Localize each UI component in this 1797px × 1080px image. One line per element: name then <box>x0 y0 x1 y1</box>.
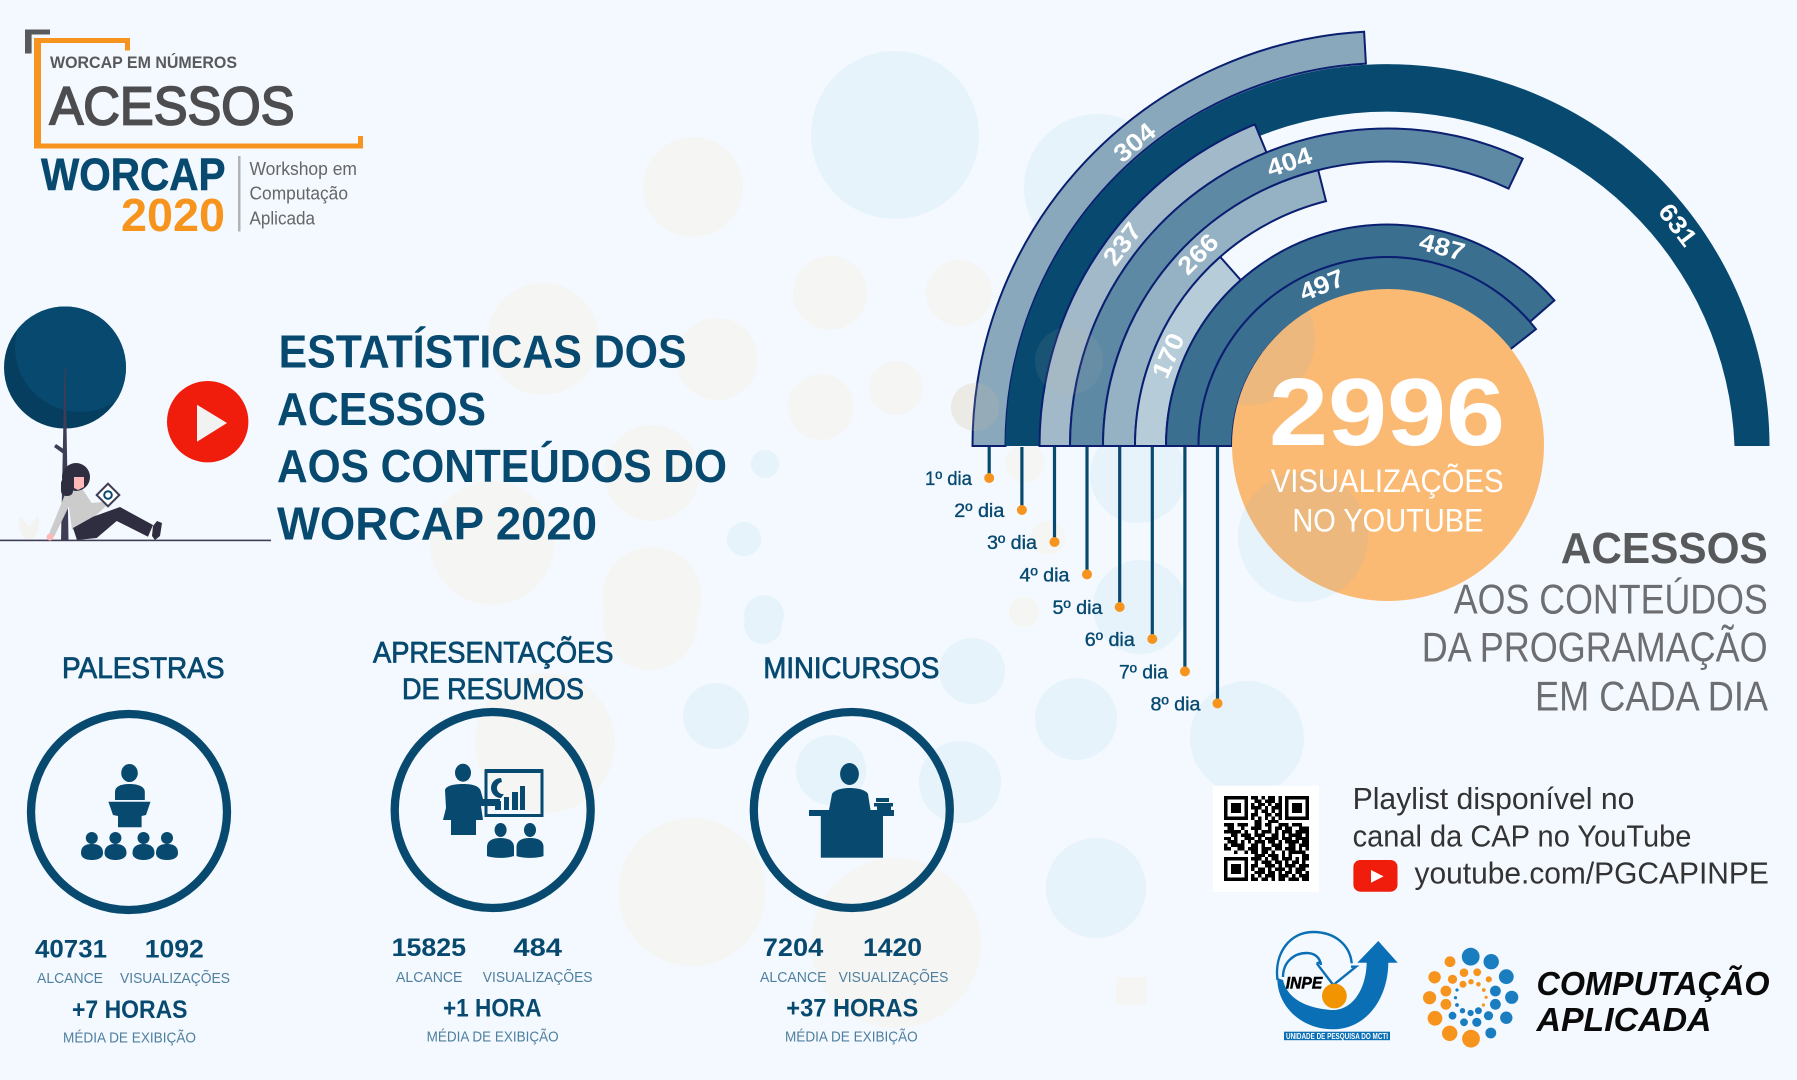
dots emblem <box>1423 948 1518 1048</box>
icon: play button <box>167 381 248 462</box>
stats: apresentações: 484 <box>513 934 562 962</box>
wordmark: COMPUTAÇÃO <box>1536 965 1770 1002</box>
main heading: ESTATÍSTICAS DOS <box>279 325 687 377</box>
stats: minicursos: 7204 <box>763 934 823 962</box>
day legend lines and labels: 3º dia <box>987 533 1037 554</box>
logo: computação aplicada <box>1423 948 1770 1048</box>
stats: minicursos: ALCANCE <box>760 969 826 986</box>
heading: apresentações de resumos: APRESENTAÇÕES <box>373 635 614 669</box>
stats: palestras <box>35 936 230 1047</box>
icon: speaker at lectern with audience <box>31 714 227 910</box>
heading: apresentações de resumos <box>373 635 614 706</box>
day legend lines and labels <box>925 447 1222 715</box>
text block: acessos aos conteúdos <box>1422 524 1768 720</box>
bar value labels <box>1098 117 1702 383</box>
day legend lines and labels: 7º dia <box>1119 662 1168 683</box>
bar: day 8, 497 <box>1198 257 1536 446</box>
text block: acessos aos conteúdos: ACESSOS <box>1561 524 1768 573</box>
bar value labels: 631 <box>1652 198 1702 252</box>
stats: apresentações: +1 HORA <box>443 995 542 1023</box>
wordmark: APLICADA <box>1535 1001 1712 1038</box>
heading: palestras: PALESTRAS <box>62 652 224 685</box>
text block: playlist: youtube.com/PGCAPINPE <box>1414 855 1769 890</box>
panel: apresentações de resumos <box>373 635 614 1045</box>
illustration: person reading under a tree <box>0 282 271 541</box>
stats: minicursos: 1420 <box>863 934 922 962</box>
bar: day 2, 631 <box>1006 64 1770 446</box>
stats: minicursos: +37 HORAS <box>786 995 918 1023</box>
callout: total views circle <box>1232 289 1544 601</box>
wordmark <box>1535 965 1770 1038</box>
day legend lines and labels: 5º dia <box>1052 598 1103 619</box>
bar value labels: 170 <box>1147 329 1191 383</box>
panel: minicursos <box>754 652 950 1045</box>
callout: total views circle: 2996 <box>1269 359 1505 466</box>
bar value labels: 497 <box>1295 264 1349 307</box>
main heading: AOS CONTEÚDOS DO <box>277 440 727 492</box>
bar: day 7, 487 <box>1166 225 1554 446</box>
bar: day 1, 304 <box>972 32 1366 446</box>
stats: palestras: +7 HORAS <box>72 996 188 1024</box>
text block: playlist: canal da CAP no YouTube <box>1353 819 1691 854</box>
main heading: WORCAP 2020 <box>277 498 597 550</box>
bar: day 3, 237 <box>1040 124 1266 446</box>
stats: minicursos: VISUALIZAÇÕES <box>839 969 948 986</box>
day legend lines and labels: 8º dia <box>1150 694 1201 715</box>
title block: WORCAP em números, acessos <box>25 30 363 148</box>
stats: apresentações <box>392 934 592 1045</box>
stats: palestras: 1092 <box>145 936 204 964</box>
stats: palestras: VISUALIZAÇÕES <box>120 970 230 987</box>
stats: apresentações: 15825 <box>392 934 466 962</box>
stats: palestras: ALCANCE <box>37 970 103 987</box>
text block: playlist: Playlist disponível no <box>1353 781 1634 816</box>
bar: day 5, 266 <box>1103 170 1326 446</box>
stats: palestras: 40731 <box>35 936 107 964</box>
main heading <box>277 325 727 550</box>
logo: INPE: UNIDADE DE PESQUISA DO MCTI <box>1286 1032 1388 1041</box>
QR code <box>1213 786 1319 892</box>
logo: WORCAP 2020: 2020 <box>121 189 225 241</box>
logo: WORCAP 2020: Aplicada <box>250 208 316 228</box>
stats: apresentações: VISUALIZAÇÕES <box>483 969 592 986</box>
chart: radial bars of accesses per day <box>925 32 1770 715</box>
stats: palestras: MÉDIA DE EXIBIÇÃO <box>63 1030 196 1047</box>
icon: teacher at desk <box>754 712 950 908</box>
bar value labels: 266 <box>1172 228 1225 281</box>
icon: presenter with chart board <box>395 712 591 908</box>
day legend lines and labels: 1º dia <box>925 469 972 490</box>
bar value labels: 404 <box>1263 142 1316 183</box>
logo: WORCAP 2020: WORCAP <box>41 149 226 200</box>
text block: playlist <box>1353 781 1769 892</box>
stats: apresentações: ALCANCE <box>396 969 462 986</box>
callout: total views circle: VISUALIZAÇÕES <box>1271 463 1504 499</box>
callout: total views circle: NO YOUTUBE <box>1292 503 1483 539</box>
logo: WORCAP 2020: Workshop em <box>250 159 357 179</box>
bar: day 6, 170 <box>1135 257 1241 446</box>
day legend lines and labels: 4º dia <box>1020 565 1070 586</box>
title block: WORCAP em números, acessos: WORCAP EM NÚMEROS <box>50 53 237 72</box>
heading: apresentações de resumos: DE RESUMOS <box>402 673 584 706</box>
day legend lines and labels: 6º dia <box>1085 630 1135 651</box>
icon: YouTube logo <box>1353 860 1398 892</box>
main heading: ACESSOS <box>277 383 486 435</box>
logo: INPE: INPE <box>1286 973 1323 992</box>
stats: minicursos: MÉDIA DE EXIBIÇÃO <box>785 1028 918 1045</box>
stats: apresentações: MÉDIA DE EXIBIÇÃO <box>427 1028 559 1045</box>
bar value labels: 487 <box>1416 228 1468 267</box>
stats: minicursos <box>760 934 948 1045</box>
logo: WORCAP 2020: Computação <box>250 184 348 204</box>
heading: minicursos: MINICURSOS <box>763 652 939 685</box>
panel: palestras <box>31 652 230 1047</box>
title block: WORCAP em números, acessos: ACESSOS <box>50 76 294 136</box>
bar value labels: 304 <box>1108 117 1162 168</box>
bar: day 4, 404 <box>1070 128 1523 446</box>
bar value labels: 237 <box>1098 217 1148 271</box>
logo: WORCAP 2020 <box>41 149 357 241</box>
day legend lines and labels: 2º dia <box>954 501 1005 522</box>
logo: INPE <box>1277 932 1398 1041</box>
